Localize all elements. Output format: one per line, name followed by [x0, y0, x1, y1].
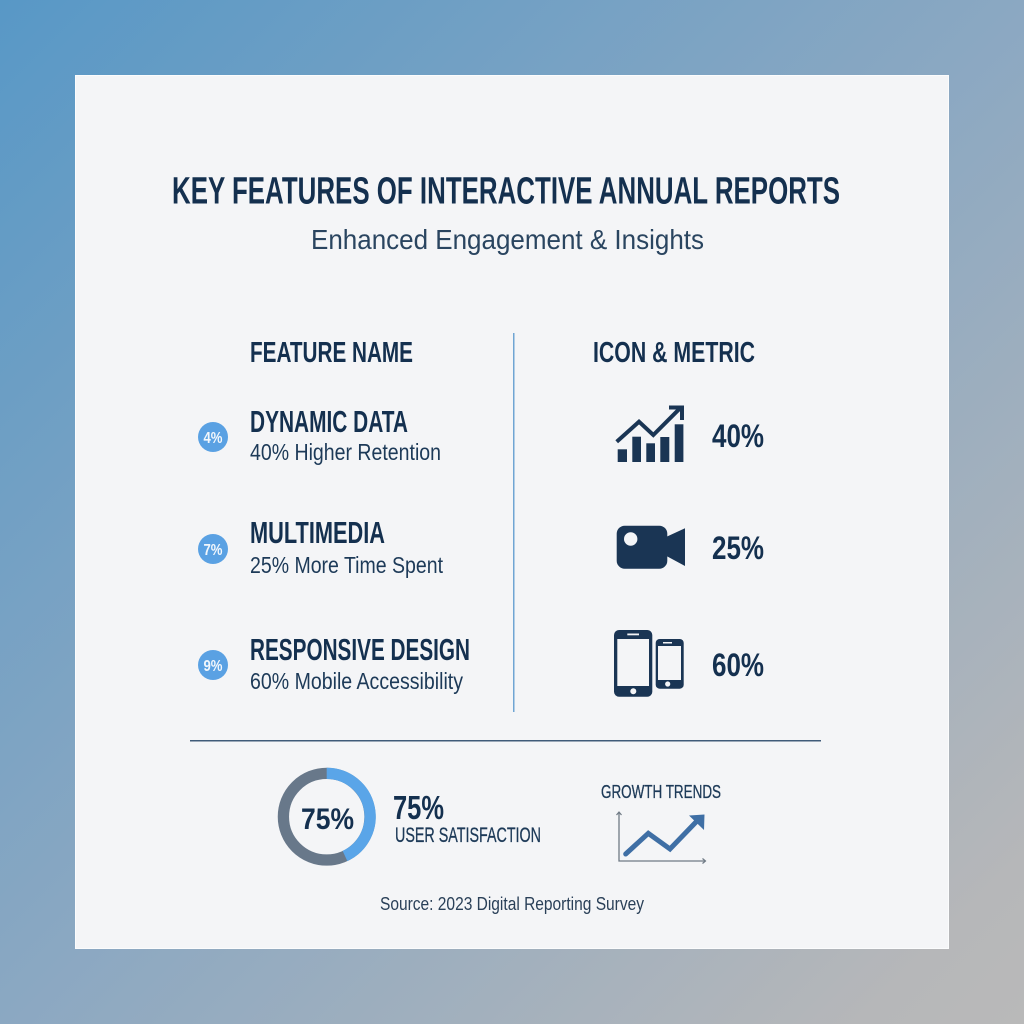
badge: responsive design: 9%: [204, 658, 222, 675]
badge: dynamic data: [198, 422, 228, 452]
icon: phones: [614, 630, 684, 697]
growth trends chart: GROWTH TRENDS: [601, 782, 721, 802]
growth trends chart: [601, 782, 721, 864]
stat: user satisfaction: USER SATISFACTION: [395, 824, 541, 847]
icon: video camera: [617, 526, 685, 569]
metric: 25%: 25%: [712, 530, 764, 566]
subtitle: Enhanced Engagement & Insights: [311, 224, 704, 255]
panel: main card: [76, 76, 948, 948]
metric: 60%: 60%: [712, 647, 764, 683]
panel: icons and metrics column: [593, 337, 764, 697]
icon: bar chart with rising arrow: [617, 408, 683, 462]
stat: user satisfaction: [393, 789, 541, 847]
feature name: multimedia: MULTIMEDIA: [250, 515, 385, 550]
feature detail: dynamic data: 40% Higher Retention: [250, 439, 441, 465]
column heading: feature name: FEATURE NAME: [250, 337, 413, 369]
panel: feature names column: [198, 337, 470, 694]
feature row: dynamic data: [198, 404, 441, 465]
feature detail: responsive design: 60% Mobile Accessibility: [250, 668, 463, 694]
feature detail: multimedia: 25% More Time Spent: [250, 552, 444, 578]
donut chart: 75% user satisfaction: 75%: [301, 803, 354, 836]
feature row: multimedia: [198, 515, 444, 578]
badge: responsive design: [198, 650, 228, 680]
stat: user satisfaction: 75%: [393, 789, 444, 826]
badge: dynamic data: 4%: [204, 430, 222, 447]
feature name: dynamic data: DYNAMIC DATA: [250, 404, 408, 439]
badge: multimedia: [198, 534, 228, 564]
feature name: responsive design: RESPONSIVE DESIGN: [250, 632, 470, 667]
metric: 40%: 40%: [712, 418, 764, 454]
donut chart: 75% user satisfaction: [283, 773, 370, 860]
column heading: icon and metric: ICON & METRIC: [593, 337, 755, 369]
source note: Source: 2023 Digital Reporting Survey: [380, 894, 644, 914]
feature row: responsive design: [198, 632, 470, 694]
badge: multimedia: 7%: [204, 542, 222, 559]
